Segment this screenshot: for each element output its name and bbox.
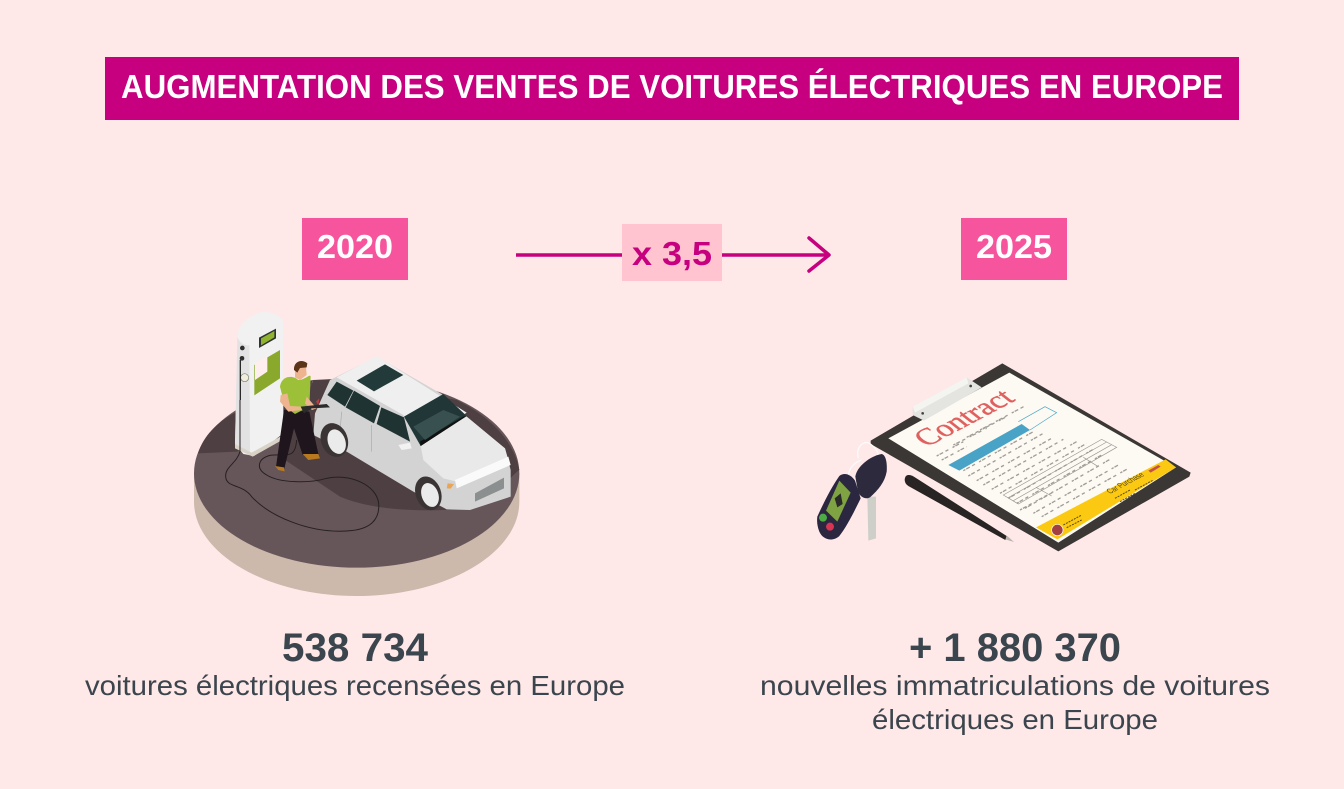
yellow footer band	[1036, 459, 1176, 539]
stat: 2025: électriques en Europe	[872, 704, 1158, 735]
stat: 2020	[85, 626, 625, 701]
form table	[1003, 439, 1117, 504]
car	[313, 356, 511, 514]
clipboard	[871, 363, 1191, 551]
year badge: 2025	[961, 218, 1067, 280]
year badge: 2020	[302, 218, 408, 280]
multiplier badge: x 3,5	[622, 224, 722, 281]
illustration: man charging an electric car	[194, 312, 519, 596]
multiplier badge: x 3,5: x 3,5	[632, 235, 712, 272]
contract text lines	[937, 405, 1127, 517]
charging station	[235, 312, 283, 457]
car purchase label	[1052, 465, 1161, 536]
pen	[905, 475, 1014, 542]
man	[275, 361, 330, 471]
platform	[194, 378, 519, 596]
car purchase label: Car Purchase	[1104, 471, 1146, 495]
arrow: growth from 2020 to 2025	[516, 238, 829, 271]
table highlights	[948, 407, 1057, 471]
year badge: 2020: 2020	[317, 228, 393, 265]
stat: 2025: + 1 880 370	[909, 626, 1121, 670]
contract heading: Contract	[906, 383, 1022, 452]
title	[105, 57, 1239, 120]
car key fob	[817, 443, 887, 541]
clip	[913, 377, 982, 421]
charging cable	[226, 400, 379, 531]
title: AUGMENTATION DES VENTES DE VOITURES ÉLECTRIQUES EN EUROPE	[121, 68, 1223, 105]
stat: 2020: voitures électriques recensées en Europe	[85, 670, 625, 701]
stat: 2025	[760, 626, 1270, 735]
stat: 2020: 538 734	[282, 626, 429, 670]
illustration: contract and car keys	[817, 363, 1191, 551]
stat: 2025: nouvelles immatriculations de voitures	[760, 670, 1270, 701]
year badge: 2025: 2025	[976, 228, 1052, 265]
